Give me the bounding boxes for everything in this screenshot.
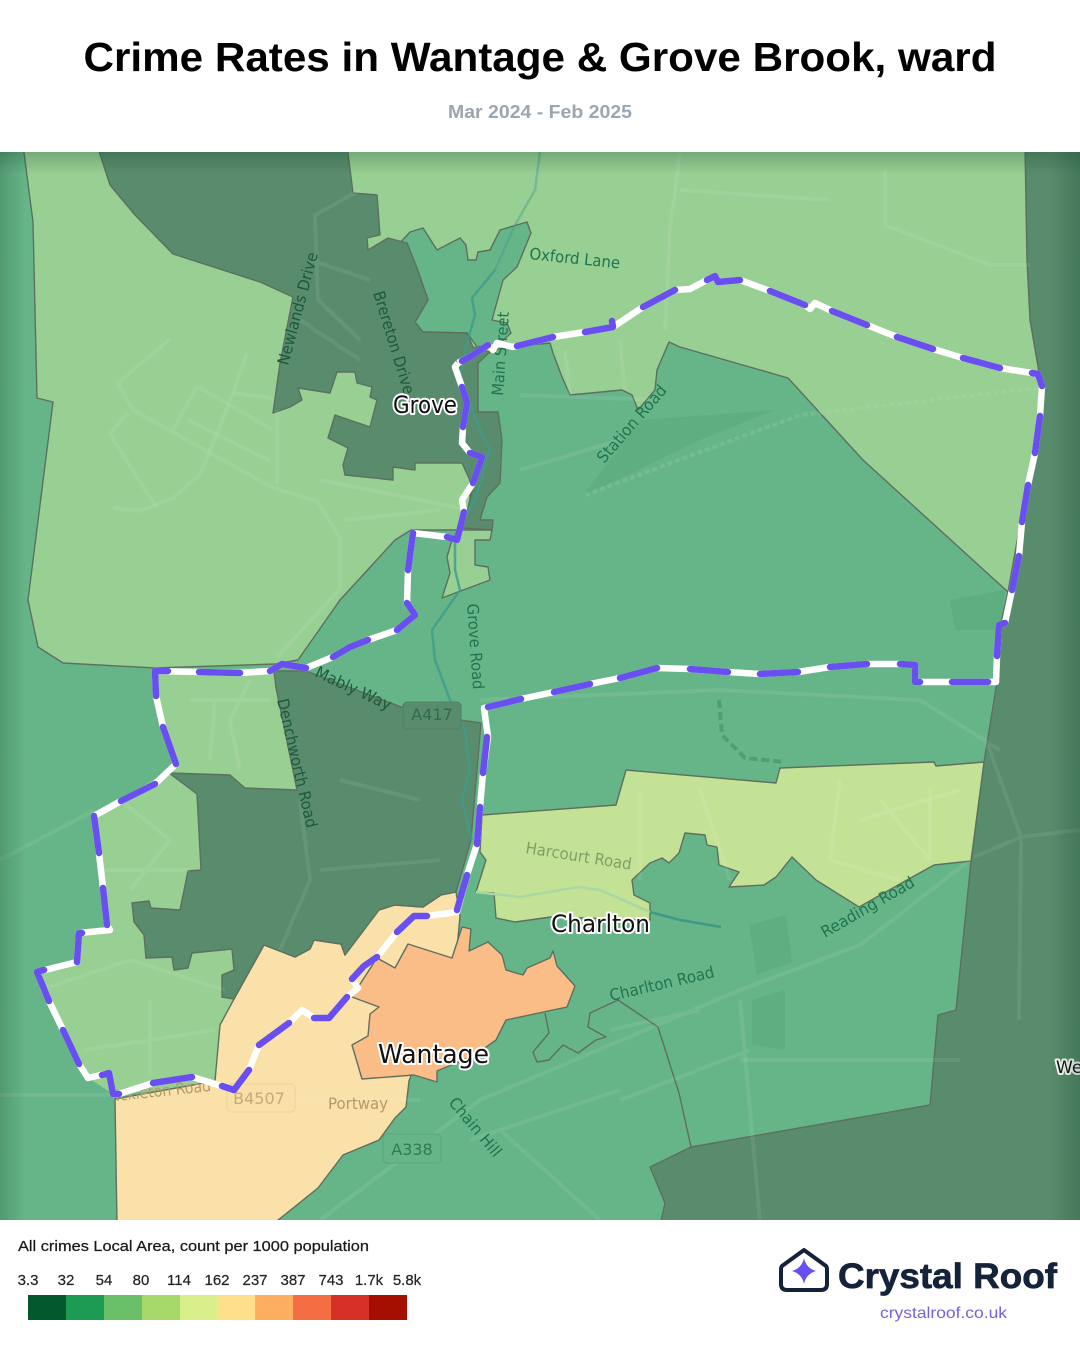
legend scale labels: 162 [204, 1272, 230, 1289]
legend title: All crimes Local Area, count per 1000 population [18, 1238, 369, 1255]
logo wordmark: Crystal Roof [838, 1257, 1057, 1296]
road label: Main Street: Main Street [488, 311, 513, 396]
legend scale labels: 1.7k [355, 1272, 384, 1289]
place label: Wantage: Wantage [378, 1040, 489, 1070]
railway line [584, 411, 822, 496]
panel: choropleth map [0, 145, 1080, 1225]
area: northern light green zone [23, 145, 1045, 668]
map base: medium crime area [0, 152, 1080, 1220]
legend scale labels: 237 [242, 1272, 268, 1289]
icon: house with star [781, 1250, 827, 1290]
legend scale labels [18, 1272, 422, 1289]
area: south-west light green zone [37, 668, 300, 1095]
road badge: A338: A338 [391, 1140, 433, 1159]
area: Grove north medium patch [398, 222, 531, 347]
rail spur [719, 700, 785, 762]
road label: Harcourt Road: Harcourt Road [524, 838, 633, 874]
legend scale labels: 3.3 [18, 1272, 38, 1289]
road label: Newlands Drive: Newlands Drive [274, 250, 322, 367]
roads: faint street network [0, 152, 1080, 1220]
legend scale labels: 5.8k [393, 1272, 422, 1289]
road label: Ickleton Road: Ickleton Road [114, 1076, 212, 1105]
area: Grove dark zone [97, 145, 502, 530]
area: shaded field patches [1000, 616, 1002, 621]
road label: Grove Road: Grove Road [463, 603, 488, 690]
river: Letcombe Brook [432, 270, 495, 840]
area: central dark zone [132, 671, 481, 999]
road badge: B4507 [227, 1084, 295, 1112]
logo: Crystal Roof [781, 1250, 1057, 1322]
legend scale labels: 387 [280, 1272, 306, 1289]
legend colour bar [28, 1295, 407, 1320]
area: Wantage orange zone [352, 927, 575, 1082]
river: Charlton stream [476, 887, 650, 912]
legend scale labels: 54 [96, 1272, 112, 1289]
area: Wantage cream zone [115, 892, 460, 1225]
ward boundary route [37, 276, 1042, 1094]
road badge: A338 [383, 1134, 441, 1163]
road label: Brereton Drive: Brereton Drive [369, 289, 419, 396]
legend scale labels: 743 [318, 1272, 344, 1289]
road label: Portway: Portway [328, 1094, 388, 1113]
road label: Charlton Road: Charlton Road [608, 962, 716, 1005]
ward line: south-east Charlton boundary [533, 1000, 691, 1147]
road badge: B4507: B4507 [233, 1089, 285, 1108]
subtitle: date range: Mar 2024 - Feb 2025 [448, 102, 632, 122]
road label: Station Road: Station Road [593, 381, 671, 467]
route: purple dashes [37, 276, 1042, 1094]
road label: Reading Road: Reading Road [818, 873, 918, 941]
place label: Charlton: Charlton [551, 910, 650, 938]
area: eastern dark zone [650, 145, 1080, 1225]
road label: Chain Hill: Chain Hill [445, 1093, 506, 1161]
river: Letcombe Brook north [495, 152, 540, 270]
route: white base line [37, 276, 1042, 1094]
logo url: crystalroof.co.uk [880, 1305, 1008, 1322]
legend [18, 1238, 422, 1320]
road label: Denchworth Road: Denchworth Road [273, 697, 321, 830]
road label: Mably Way: Mably Way [312, 662, 395, 714]
map edge vignette [0, 152, 1080, 1220]
legend scale labels: 32 [58, 1272, 74, 1289]
river: Charlton stream east [650, 912, 721, 927]
legend scale labels: 114 [167, 1272, 191, 1289]
road label: Oxford Lane: Oxford Lane [529, 244, 621, 272]
title: Crime Rates in Wantage & Grove Brook, ward [84, 34, 996, 80]
legend scale labels: 80 [133, 1272, 149, 1289]
area: small light patch south of Grove [442, 530, 492, 598]
place label: Grove: Grove [393, 391, 457, 419]
road badge: A417: A417 [411, 705, 453, 724]
area: Charlton yellow-green zone [476, 762, 984, 922]
road badge: A417 [403, 702, 461, 729]
